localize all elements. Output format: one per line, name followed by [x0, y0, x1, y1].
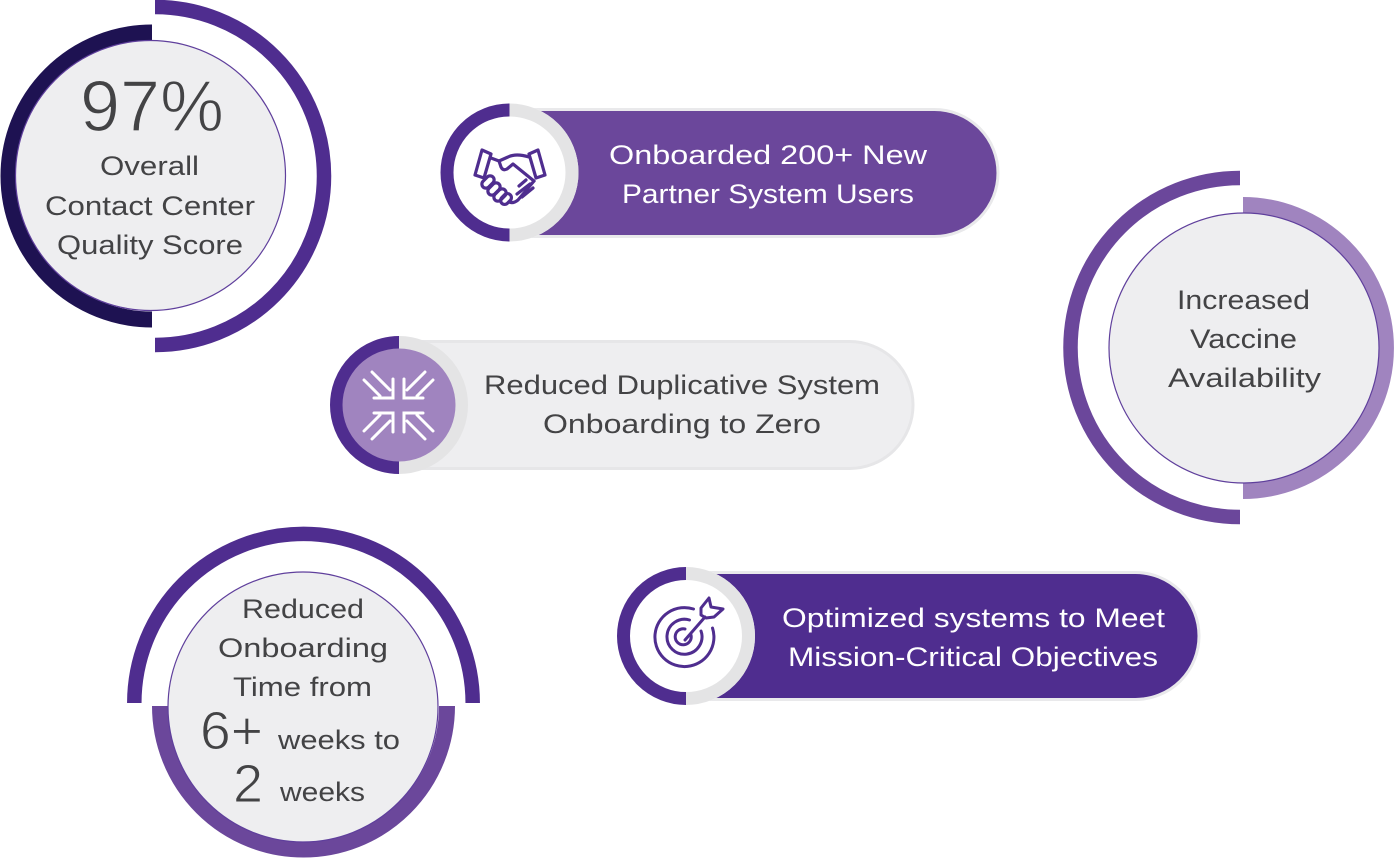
label: reduced onboarding time: [218, 594, 388, 702]
outer arc: left purple: [1070, 178, 1240, 517]
label: duplicative onboarding: Onboarding to Zero: [543, 409, 821, 439]
label: partner users: [609, 140, 928, 209]
panel: mission objectives pill: [617, 567, 1199, 705]
label: mission objectives: Mission-Critical Objectives: [788, 642, 1158, 672]
label: duplicative onboarding: [484, 370, 880, 439]
stat: 2 weeks: weeks: [279, 777, 365, 807]
inner disc: [16, 40, 286, 310]
arc: bottom purple: [160, 706, 447, 850]
ring and lilac disc: [337, 342, 462, 468]
label: mission objectives: [782, 603, 1166, 672]
label: vaccine availability: Increased: [1177, 285, 1310, 315]
label: vaccine availability: Vaccine: [1190, 324, 1297, 354]
inner disc: [1109, 213, 1379, 483]
label: reduced onboarding time: Time from: [233, 672, 372, 702]
ring and white disc: [440, 104, 578, 242]
icon: handshake: [475, 150, 545, 206]
arc: right lilac: [1243, 205, 1386, 491]
label: reduced onboarding time: Reduced: [242, 594, 364, 624]
panel: partner users pill: [440, 104, 998, 242]
panel: onboarding time circle: [134, 534, 473, 850]
label: quality score: Contact Center: [45, 191, 255, 221]
label: partner users: Partner System Users: [622, 179, 914, 209]
icon: arrows pointing inward: [364, 372, 433, 439]
ring and white disc: [617, 567, 755, 705]
arc: left dark navy: [8, 32, 152, 320]
pill body: [399, 342, 913, 468]
label: quality score: [45, 151, 255, 260]
stat: 6+ weeks to: weeks to: [277, 725, 400, 755]
label: quality score: Quality Score: [57, 230, 243, 260]
stat: 97%: 97%: [80, 67, 224, 147]
label: partner users: Onboarded 200+ New: [609, 140, 928, 170]
panel: vaccine availability circle: [1070, 178, 1386, 517]
panel: quality score circle: [8, 7, 324, 345]
stat: 2 weeks: 2: [233, 754, 263, 814]
outer arc: right purple: [155, 7, 324, 345]
stat: 2 weeks: [233, 754, 365, 814]
label: vaccine availability: [1168, 285, 1322, 393]
label: mission objectives: Optimized systems to Meet: [782, 603, 1166, 633]
label: reduced onboarding time: Onboarding: [218, 633, 388, 663]
icon: target with arrow: [655, 598, 723, 667]
pill body: [686, 572, 1199, 700]
stat: 6+ weeks to: 6+: [200, 701, 263, 761]
label: quality score: Overall: [100, 151, 199, 181]
pill body: [510, 110, 998, 236]
inner disc: [168, 572, 438, 842]
stat: 6+ weeks to: [200, 701, 400, 761]
outer arc: top purple: [134, 534, 473, 703]
panel: duplicative onboarding pill: [337, 342, 913, 468]
label: vaccine availability: Availability: [1168, 363, 1322, 393]
label: duplicative onboarding: Reduced Duplicative System: [484, 370, 880, 400]
